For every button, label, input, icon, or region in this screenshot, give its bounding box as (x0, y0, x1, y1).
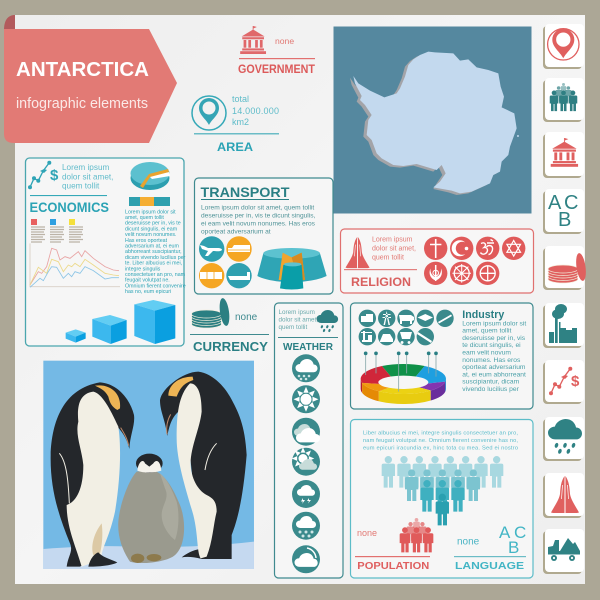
icon: cloud and moon (292, 545, 320, 573)
sidebar card: language: A (548, 192, 562, 214)
religion text: quem tollit (372, 254, 404, 261)
title: ANTARCTICA (16, 59, 149, 81)
industry text: eam velit novum (462, 350, 511, 356)
economics intro: quem tollit (62, 182, 100, 190)
penguin chick (118, 454, 184, 563)
sidebar card: government (543, 132, 584, 178)
economics body text: velit novum nonumes. (125, 232, 177, 238)
religion rule (344, 269, 417, 270)
icon: plane (199, 236, 224, 262)
currency value: none (235, 312, 258, 323)
sidebar card: industry (543, 303, 584, 348)
panel: industry (350, 303, 533, 409)
icon: cross (424, 237, 447, 260)
economics body text: abhorreant suscipiantur, (125, 249, 182, 255)
economics body text: Omnium fierent convenire (125, 283, 186, 289)
right adult penguin (160, 372, 247, 559)
icon: rain (292, 354, 320, 382)
people pyramid (382, 456, 503, 525)
icon: red crowd (400, 518, 433, 552)
icon: thunderstorm (292, 480, 320, 508)
currency heading: CURRENCY (193, 339, 268, 354)
language rule (454, 556, 526, 557)
area value: km2 (232, 117, 249, 127)
icon: ship (226, 263, 252, 288)
panel: religion (340, 229, 534, 293)
industry text: amet, quem tollit (462, 328, 512, 335)
economics body text: amet, quem tollit (125, 215, 164, 221)
area block (192, 94, 279, 154)
sidebar card: transport (543, 529, 584, 574)
icon: praying hands (346, 237, 370, 268)
chart legend (31, 219, 83, 242)
economics heading: ECONOMICS (30, 200, 109, 215)
subtitle: infographic elements (16, 96, 148, 112)
icon: truck (226, 236, 252, 262)
language value: none (457, 536, 480, 547)
weather rule (278, 337, 338, 338)
sidebar card: economics (543, 360, 584, 404)
weather text: quem tollit (278, 324, 307, 331)
population text: nam feugait volutpat ne. Omnium fierent convenire has no, (363, 438, 518, 444)
economics body text: consectetuer an pro, nam (125, 272, 186, 278)
sidebar card: religion (543, 473, 584, 518)
transport text: deseruisse per in, vis te dicunt singulis, (201, 212, 316, 220)
population heading: POPULATION (357, 560, 429, 572)
sidebar card: language: B (558, 209, 571, 231)
economics body text: feugait volutpat ne. (125, 278, 170, 284)
area value: total (232, 94, 249, 104)
economics body text: Lorem ipsum dolor sit (125, 209, 176, 215)
icon: location pin (192, 96, 226, 130)
industry text: vivendo lucilius per (462, 386, 520, 393)
industry text: at, ei eum abhorreant (462, 371, 526, 378)
panel: population and language (350, 420, 533, 578)
sidebar card: currency (543, 246, 587, 290)
icon: rain cloud (316, 310, 338, 332)
industry text: te dicunt singulis, ei (462, 342, 521, 349)
weather text: Lorem ipsum (278, 309, 315, 316)
icon: letters A C B: A (499, 523, 511, 542)
population text: Liber albucius ei mei, integre singulis consectetuer an pro, (363, 431, 518, 437)
currency block (190, 298, 269, 354)
population text: eum epicuri iracundia ex, hinc tota cu mea. Sed ei nostro (363, 445, 518, 451)
area heading: AREA (217, 140, 253, 154)
panel: economics (26, 158, 186, 346)
panel: weather (274, 303, 343, 578)
economics body text: dicunt singulis, ei eam (125, 226, 178, 232)
religion text: dolor sit amet, (372, 246, 416, 253)
icon: train (199, 263, 224, 288)
transport text: ei eam velit novum nonumes. Has eros (201, 220, 316, 228)
transport heading: TRANSPORT (200, 184, 290, 200)
weather heading: WEATHER (283, 341, 333, 353)
economics intro: dolor sit amet, (62, 172, 113, 182)
left adult penguin (51, 382, 134, 567)
ring chart (361, 351, 446, 404)
industry heading: Industry (462, 309, 505, 321)
icon: letters A C B: B (508, 538, 519, 557)
icon: letters A C B: C (514, 523, 526, 542)
icon: government building (240, 26, 266, 54)
icon: crescent and star (450, 237, 473, 260)
penguin illustration (43, 361, 254, 569)
population value: none (357, 528, 377, 538)
icon: star of David (502, 237, 525, 260)
icon: clouds (292, 418, 320, 446)
government block (238, 26, 315, 76)
area value: 14.000.000 (232, 106, 279, 116)
government value: none (275, 36, 294, 46)
industry text: suscipiantur, dicam (462, 379, 520, 386)
icon: trend with dollar (28, 161, 59, 189)
3D band chart (129, 197, 170, 206)
map of Antarctica (334, 26, 532, 214)
economics intro: Lorem ipsum (62, 163, 110, 172)
icon: dharma wheel (450, 262, 473, 285)
icon: khanda (424, 262, 447, 285)
industry text: nonumes. Has eros (462, 357, 521, 364)
industry text: oporteat adversarium (462, 364, 526, 371)
sidebar card: language: C (564, 192, 578, 214)
transport text: oporteat adversarium at (201, 228, 271, 236)
religion heading: RELIGION (351, 275, 411, 289)
sidebar card: language (543, 189, 584, 234)
economics body text: has no, eum epicuri (125, 289, 171, 295)
icon: snow (292, 512, 320, 540)
government heading: GOVERNMENT (238, 64, 315, 76)
religion text: Lorem ipsum (372, 237, 413, 244)
line chart (30, 243, 120, 287)
industry text: deseruisse per in, vis (462, 335, 526, 342)
population rule (355, 556, 430, 557)
3D cube bars (66, 300, 175, 344)
transport text: Lorem ipsum dolor sit amet, quem tollit (201, 204, 314, 212)
icon: om (476, 237, 499, 260)
economics body text: dicam vivendo lucilius per (125, 255, 186, 261)
3D pie chart (130, 162, 170, 190)
economics body text: Has eros oporteat (125, 238, 168, 244)
government rule (239, 58, 315, 59)
language heading: LANGUAGE (455, 560, 524, 572)
icon: sun behind cloud (292, 447, 320, 476)
area rule (194, 133, 279, 134)
transport rule (201, 199, 289, 200)
icon: circled cross (476, 262, 499, 285)
economics body text: deseruisse per in, vis te (125, 221, 181, 227)
industry icon grid (359, 310, 454, 345)
icon: sun (292, 385, 320, 413)
economics body text: te. Liber albucius ei mei, (125, 261, 182, 267)
sidebar card: weather (543, 417, 584, 461)
sidebar card: population (543, 78, 584, 122)
economics body text: integre singulis (125, 266, 161, 272)
cone chart (257, 248, 327, 289)
economics body text: adversarium at, ei eum (125, 244, 179, 250)
weather text: dolor sit amet, (278, 316, 318, 324)
icon: coins (192, 298, 231, 328)
currency rule (190, 334, 269, 335)
economics rule (30, 195, 107, 196)
panel: transport (194, 178, 333, 294)
industry text: Lorem ipsum dolor sit (462, 320, 526, 327)
title ribbon (4, 15, 177, 143)
sidebar card: area (543, 24, 584, 69)
